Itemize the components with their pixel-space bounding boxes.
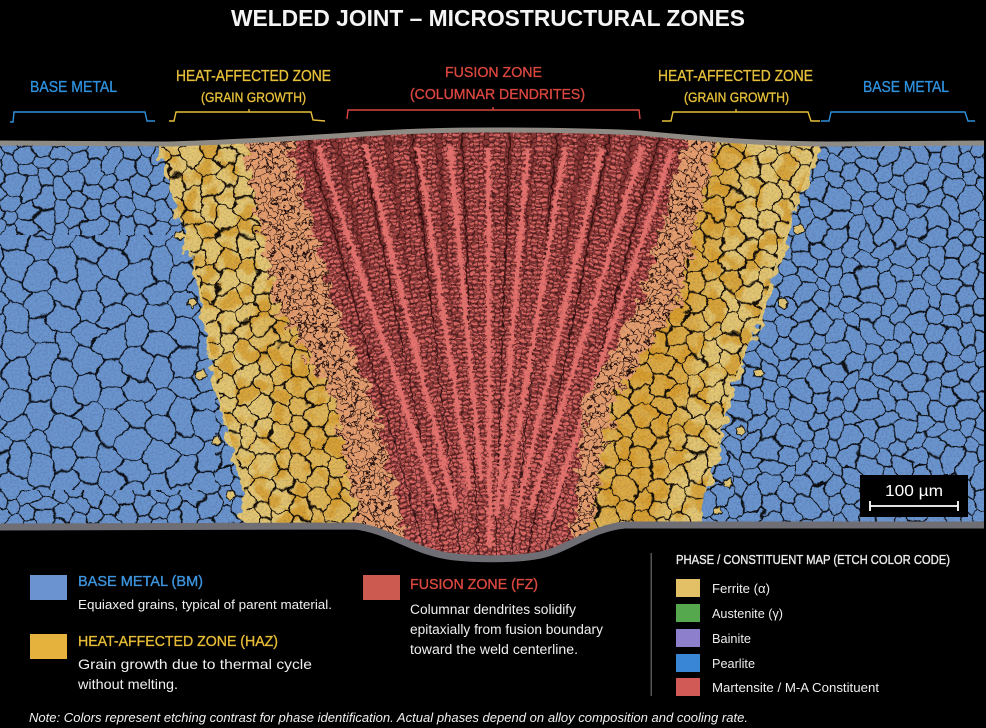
dendrites (283, 132, 688, 556)
irregular dendrite network (284, 132, 688, 556)
legend: heat-affected zone (30, 634, 312, 692)
dendrite texture (276, 125, 696, 557)
grain boundaries in the heat-affected zone (160, 142, 814, 528)
zone label: left heat-affected zone (169, 68, 331, 121)
base metal region (0, 146, 984, 524)
heat-affected zone region (155, 135, 825, 535)
fusion zone base colour (283, 132, 688, 556)
zone label: right base metal (821, 79, 975, 121)
legend: heat-affected zone: without melting. (77, 676, 178, 692)
title: WELDED JOINT – MICROSTRUCTURAL ZONES (231, 5, 745, 31)
zone label: right heat-affected zone (658, 68, 820, 121)
zone label: right heat-affected zone: HEAT-AFFECTED ZONE (658, 68, 813, 85)
scale bar: 100 µm (885, 483, 943, 500)
fine etch mottling (0, 125, 986, 565)
legend: base metal: BASE METAL (BM) (78, 574, 203, 590)
legend: base metal (30, 574, 332, 612)
phase / constituent map (650, 552, 950, 696)
zone label: left base metal (10, 79, 155, 122)
zone label: fusion zone: (COLUMNAR DENDRITES) (410, 87, 585, 103)
legend: base metal: Equiaxed grains, typical of parent material. (78, 597, 332, 612)
legend: fusion zone: Columnar dendrites solidify (410, 602, 576, 617)
zone label: left base metal: BASE METAL (30, 79, 117, 96)
zone label: left heat-affected zone: HEAT-AFFECTED ZONE (176, 68, 331, 85)
zone label: fusion zone (347, 64, 640, 119)
legend: fusion zone: FUSION ZONE (FZ) (410, 577, 538, 593)
legend: fusion zone: toward the weld centerline. (410, 642, 578, 657)
stray ferrite grains at the HAZ edge (176, 224, 804, 516)
micrograph: weld cross-section (0, 128, 984, 562)
legend: fusion zone: epitaxially from fusion boundary (410, 622, 603, 637)
dark interdendritic boundaries (304, 125, 663, 557)
phase: bainite: Bainite (712, 631, 751, 646)
zone label: left heat-affected zone: (GRAIN GROWTH) (201, 90, 306, 105)
left transition band of small grains (241, 140, 411, 538)
primary dendrite stems: serrated edges (318, 145, 672, 548)
top weld surface band (0, 130, 984, 144)
right transition band of small grains (568, 125, 720, 570)
phase map heading: PHASE / CONSTITUENT MAP (ETCH COLOR CODE) (676, 552, 950, 567)
scale bar (860, 475, 968, 517)
zone label: fusion zone: FUSION ZONE (445, 64, 542, 81)
phase: pearlite: Pearlite (712, 656, 755, 671)
side arms of the dendrites (276, 125, 696, 557)
zone label: right heat-affected zone: (GRAIN GROWTH) (684, 90, 789, 105)
zone label: right base metal: BASE METAL (863, 79, 949, 96)
phase: bainite (676, 629, 751, 647)
bottom weld surface band (0, 525, 984, 559)
footnote: Note: Colors represent etching contrast for phase identification. Actual phases depend on alloy composition and cooling rate. (29, 711, 748, 725)
base metal medium grains (0, 146, 984, 524)
legend: heat-affected zone: Grain growth due to thermal cycle (78, 656, 312, 672)
phase: ferrite (676, 579, 770, 597)
phase: pearlite (676, 654, 755, 672)
legend: fusion zone (363, 575, 603, 657)
orange tones in the heat-affected zone (160, 142, 814, 530)
phase: ferrite: Ferrite (α) (712, 581, 770, 596)
legend: heat-affected zone: HEAT-AFFECTED ZONE (HAZ) (78, 634, 278, 650)
primary dendrite stems: cores (318, 145, 672, 548)
phase: austenite (676, 604, 783, 622)
phase: austenite: Austenite (γ) (712, 606, 783, 621)
phase: martensite: Martensite / M-A Constituent (712, 680, 879, 695)
base metal large grains (0, 235, 215, 490)
phase: martensite (676, 678, 879, 696)
